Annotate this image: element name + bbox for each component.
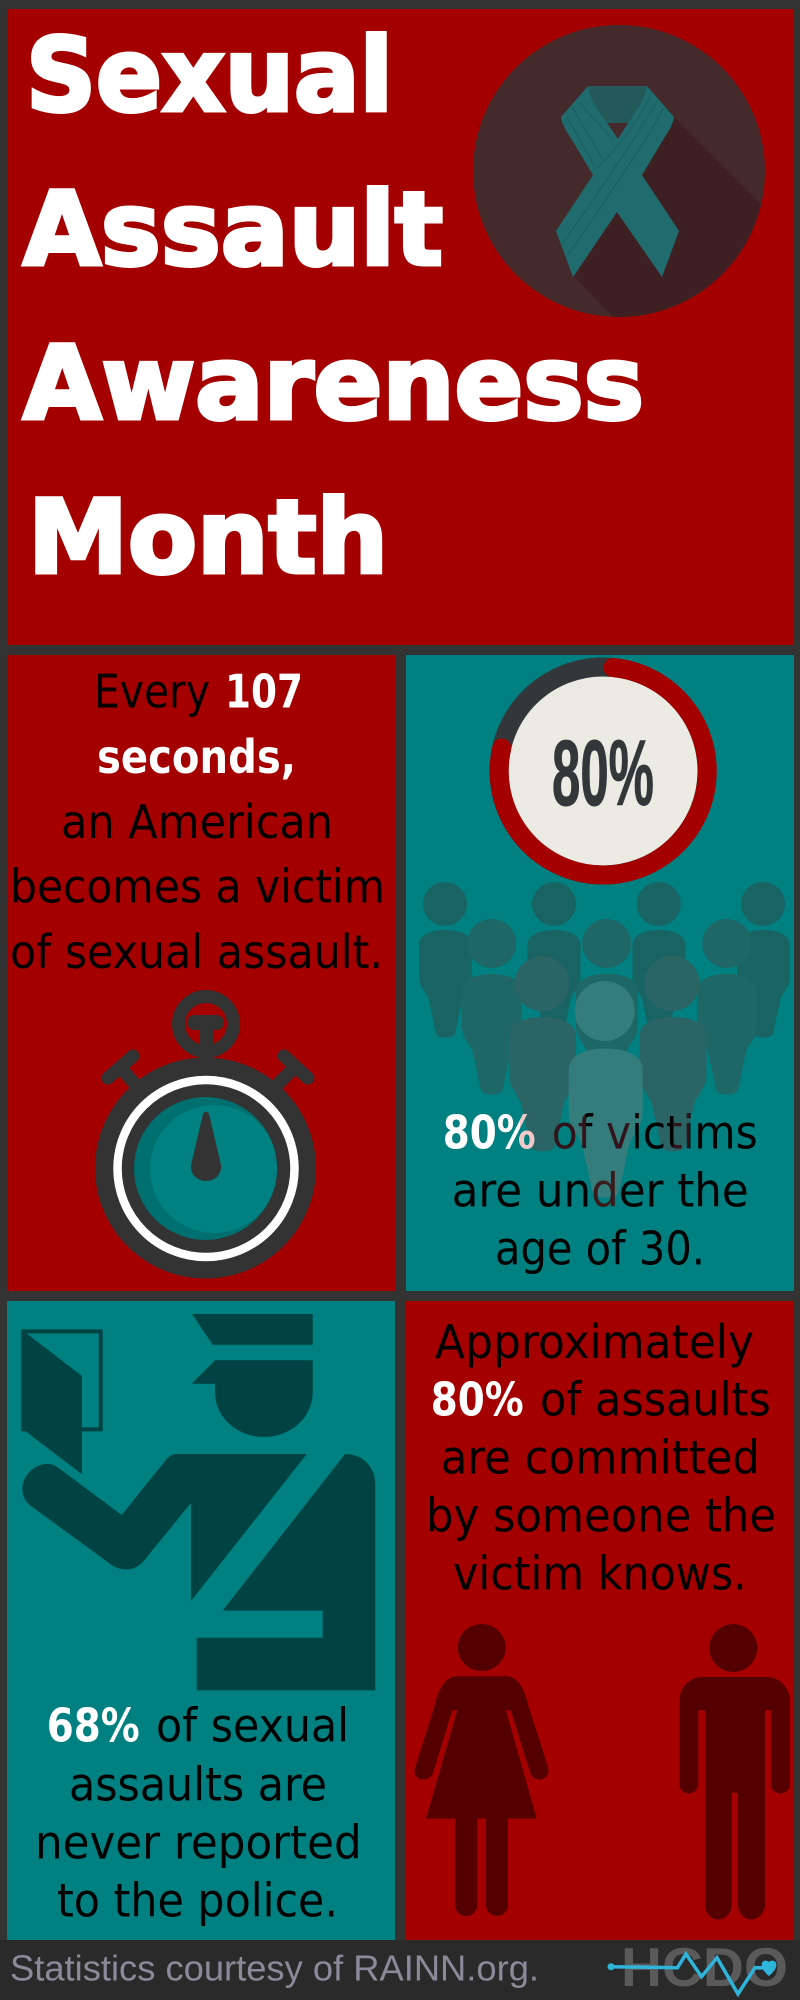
text: 68 percent never reported: 68% (47, 1698, 140, 1752)
icon: police officer with open notebook (21, 1314, 375, 1690)
chart: 80 percent ring gauge: 80% (552, 721, 654, 825)
icon: crowd of people (419, 882, 790, 1198)
text: every 107 seconds: 107 (225, 665, 303, 719)
panel: header (7, 9, 800, 645)
text: 80 percent by someone known: victim knows. (453, 1546, 747, 1600)
text: 80 percent of victims: age of 30. (495, 1222, 705, 1276)
text: every 107 seconds: of sexual assault. (10, 925, 383, 979)
icon: man figure (679, 1624, 790, 1920)
third row figures (509, 956, 706, 1151)
text: 80 percent by someone known (426, 1315, 776, 1600)
text: 80 percent by someone known: of assaults (540, 1372, 771, 1426)
icon: stopwatch (95, 996, 316, 1278)
text: every 107 seconds: seconds, (97, 730, 296, 784)
text: 80 percent of victims (443, 1106, 758, 1276)
text: 80 percent of victims: of victims (552, 1106, 758, 1160)
text: 68 percent never reported: of sexual (156, 1698, 349, 1752)
title (23, 16, 644, 597)
chart: 80 percent ring gauge (490, 658, 716, 884)
text: 68 percent never reported: to the police. (57, 1873, 338, 1927)
text: every 107 seconds: becomes a victim (10, 860, 385, 914)
back row figures (419, 882, 790, 1038)
text: 80 percent by someone known: Approximately (435, 1315, 754, 1369)
footer credit: Statistics courtesy of RAINN.org. (10, 1948, 539, 1989)
text: 68 percent never reported (35, 1698, 362, 1927)
text: 80 percent of victims: 80% (443, 1106, 536, 1160)
panel: 80 percent of victims (406, 655, 794, 1291)
panel: every 107 seconds (7, 655, 395, 1291)
front figure (569, 981, 643, 1198)
title: Awareness (23, 324, 644, 444)
icon: awareness ribbon in circle (473, 25, 765, 317)
text: every 107 seconds: Every (94, 665, 210, 719)
title: Assault (23, 170, 443, 289)
text: 80 percent by someone known: by someone the (426, 1488, 776, 1542)
logo: HCDO with heartbeat line: HCDO (621, 1936, 788, 1998)
second row figures (462, 919, 757, 1094)
footer band background (0, 1940, 800, 2000)
text: every 107 seconds (10, 665, 385, 979)
text: 68 percent never reported: never reported (35, 1815, 362, 1869)
title: Month (28, 478, 388, 598)
text: 68 percent never reported: assaults are (69, 1757, 327, 1811)
text: every 107 seconds: an American (61, 795, 333, 849)
text: 80 percent by someone known: 80% (431, 1372, 524, 1426)
title: Sexual (26, 16, 393, 135)
icon: woman figure (415, 1624, 549, 1916)
panel: committed by someone known (406, 1301, 794, 1940)
text: 80 percent of victims: are under the (452, 1163, 749, 1217)
text: 80 percent by someone known: are committed (441, 1430, 760, 1484)
panel: never reported to police (7, 1301, 395, 1940)
